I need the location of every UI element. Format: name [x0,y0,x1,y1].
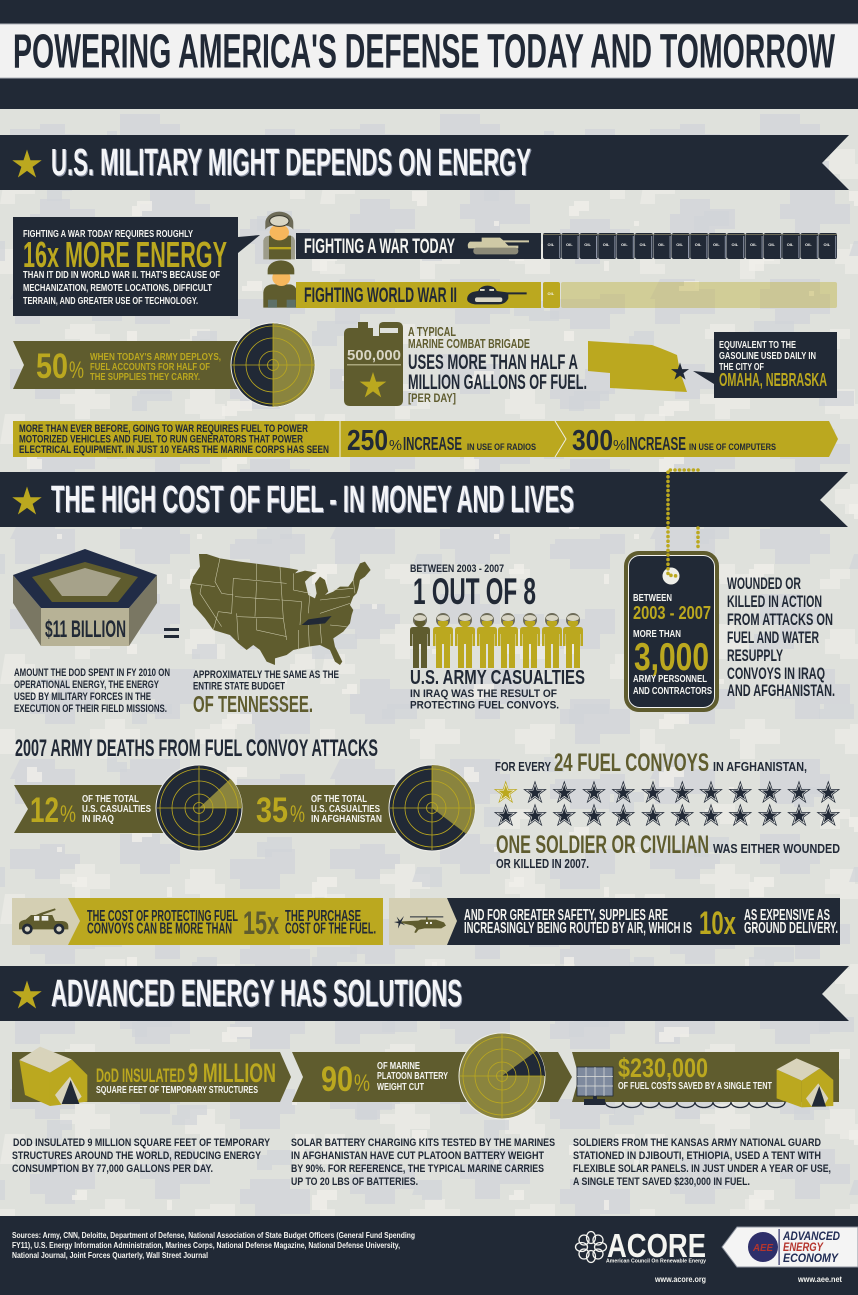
icon: insulated tent [19,1047,87,1106]
icon: solar panel with cable [577,1067,791,1108]
text: state budget of Tennessee: APPROXIMATELY THE SAME AS THE [193,669,339,681]
callout: 16x more energy: THAN IT DID IN WORLD WAR II. THAT'S BECAUSE OF [23,269,220,281]
radar chart: 12% Iraq [156,765,242,851]
ribbon: 50% of supplies: FUEL ACCOUNTS FOR HALF OF [90,361,210,373]
icon: Pentagon $11 billion [13,549,157,646]
text: one soldier or civilian: OR KILLED IN 2007. [496,856,589,871]
text: marine brigade fuel use [408,325,587,405]
text: one soldier or civilian [496,831,840,871]
callout: Omaha, Nebraska: GASOLINE USED DAILY IN [719,350,816,362]
dog tag: 3,000 wounded or killed: AND CONTRACTORS [633,685,712,697]
arrow bar: increases in electrical use: 300 [572,425,613,457]
ribbon: 50% of supplies: WHEN TODAY'S ARMY DEPLOYS, [90,351,221,363]
text: DoD insulation detail: CONSUMPTION BY 77,000 GALLONS PER DAY. [12,1163,213,1175]
ribbon: casualties 12% and 35%: U.S. CASUALTIES [82,803,151,815]
oil barrels: war today (16x): OIL [732,242,739,247]
text: marine brigade fuel use: MARINE COMBAT BRIGADE [408,337,530,351]
ribbon: casualties 12% and 35%: % [290,801,305,828]
arrow bar: increases in electrical use: INCREASE [403,434,462,454]
oil barrels: war today (16x) [543,233,837,259]
arrow bar: increases in electrical use: IN USE OF COMPUTERS [689,442,776,452]
text: solar battery detail: SOLAR BATTERY CHARGING KITS TESTED BY THE MARINES [291,1137,555,1149]
oil barrels: war today (16x): OIL [566,242,573,247]
logo: ACORE: American Council On Renewable Energy [606,1258,706,1264]
text: DoD energy spend: USED BY MILITARY FORCES IN THE [14,691,151,703]
ribbon: casualties 12% and 35% [14,785,405,833]
title band [0,0,858,109]
callout: 16x more energy: TERRAIN, AND GREATER USE OF TECHNOLOGY. [23,295,198,307]
text: state budget of Tennessee: ENTIRE STATE BUDGET [193,680,285,692]
arrow bar: increases in electrical use: % [389,437,402,454]
sources: National Journal, Joint Forces Quarterly, Wall Street Journal [12,1250,208,1260]
oil barrels: war today (16x): OIL [805,242,812,247]
logo: Advanced Energy Economy: ADVANCED [782,1231,840,1243]
panel: cost of protecting convoys: 15x [243,905,279,941]
icon: WWII tank [467,286,527,304]
text: solar battery detail: BY 90%. FOR REFERENCE, THE TYPICAL MARINE CARRIES [291,1163,544,1175]
callout: 16x more energy: MECHANIZATION, REMOTE LOCATIONS, DIFFICULT [23,282,212,294]
icon: solar tent [777,1058,833,1107]
arrow bar: increases in electrical use: MORE THAN EVER BEFORE, GOING TO WAR REQUIRES FUEL TO POWER [19,423,308,435]
text: 24 fuel convoys: IN AFGHANISTAN, [713,759,807,774]
website links: www.acore.org [654,1275,706,1284]
arrow bar: increases in electrical use: ELECTRICAL EQUIPMENT. IN JUST 10 YEARS THE MARINE CORPS HAS SEEN [19,444,329,456]
callout: Omaha, Nebraska [693,332,837,398]
dog tag: 3,000 wounded or killed: 2003 - 2007 [633,603,711,623]
icon: modern tank [468,238,529,254]
panel: supplies routed by air [389,898,840,945]
website links: www.aee.net [797,1275,842,1284]
pictogram: eight soldiers, one highlighted [410,613,583,668]
callout: Omaha, Nebraska: THE CITY OF [719,361,764,373]
ribbon: 50% of supplies: THE SUPPLIES THEY CARRY. [90,371,200,383]
ribbon: 90% battery weight cut [292,1052,572,1102]
dog tag: 3,000 wounded or killed: BETWEEN [633,592,672,604]
oil barrels: war today (16x): OIL [640,242,647,247]
equals sign [164,628,179,638]
icon: humvee [19,908,68,934]
icon: WWII soldier [263,260,297,308]
oil barrels: war today (16x): OIL [584,242,592,247]
text: marine brigade fuel use: USES MORE THAN HALF A [408,351,578,374]
oil barrels: war today (16x): OIL [750,242,757,247]
oil barrels: war today (16x): OIL [695,242,702,247]
ribbon: casualties 12% and 35%: % [60,801,76,828]
text: wounded or killed in action: RESUPPLY [727,646,783,665]
callout: 16x more energy [13,217,260,316]
oil barrels: World War II (1x): OIL [548,291,555,296]
oil barrels: war today (16x): OIL [713,242,720,247]
text: solar battery detail [291,1137,555,1188]
ribbon: casualties 12% and 35%: 35 [256,791,288,830]
ribbon: $230,000 saved by a single tent: OF FUEL COSTS SAVED BY A SINGLE TENT [618,1080,772,1092]
stat: 1 out of 8 casualties [410,563,585,712]
panel: supplies routed by air: INCREASINGLY BEING ROUTED BY AIR, WHICH IS [464,920,692,937]
callout: 16x more energy: FIGHTING A WAR TODAY REQUIRES ROUGHLY [23,228,193,240]
oil barrels: war today (16x): OIL [787,242,794,247]
section banner: advanced energy solutions [0,966,849,1021]
heading: 2007 army deaths: 2007 ARMY DEATHS FROM FUEL CONVOY ATTACKS [15,735,378,762]
ribbon: casualties 12% and 35%: IN AFGHANISTAN [311,813,382,825]
ribbon: 90% battery weight cut: % [354,1070,370,1097]
logo: Advanced Energy Economy: AEE [752,1243,773,1254]
arrow bar: increases in electrical use: IN USE OF RADIOS [467,442,536,452]
text: state budget of Tennessee [193,669,339,717]
text: DoD energy spend: AMOUNT THE DOD SPENT IN FY 2010 ON [14,667,170,679]
arrow bar: increases in electrical use: MOTORIZED VEHICLES AND FUEL TO RUN GENERATORS THAT POWER [19,434,303,446]
ribbon: $230,000 saved by a single tent: $230,000 [618,1053,708,1083]
text: one soldier or civilian: ONE SOLDIER OR CIVILIAN [496,831,709,859]
footer [0,1216,858,1295]
text: DoD insulation detail: STRUCTURES AROUND THE WORLD, REDUCING ENERGY [12,1150,262,1162]
ribbon: DoD insulated 9 million: 9 MILLION [188,1058,276,1088]
oil barrels: war today (16x): OIL [603,242,610,247]
radar chart: 50% [231,323,315,407]
panel: cost of protecting convoys: COST OF THE FUEL. [285,920,376,938]
section banner: advanced energy solutions: ADVANCED ENERGY HAS SOLUTIONS [51,973,462,1015]
ribbon: 90% battery weight cut: OF MARINE [377,1060,420,1072]
oil barrels: war today (16x): OIL [676,242,684,247]
text: wounded or killed in action: WOUNDED OR [727,574,801,593]
text: solar battery detail: IN AFGHANISTAN HAVE CUT PLATOON BATTERY WEIGHT [291,1150,544,1162]
oil barrels: war today (16x): OIL [824,242,831,247]
text: DoD energy spend [14,667,170,715]
ribbon: $230,000 saved by a single tent [572,1052,839,1108]
logo: ACORE [576,1227,706,1264]
logo: Advanced Energy Economy [722,1227,858,1267]
text: state budget of Tennessee: OF TENNESSEE. [193,691,313,717]
ribbon: 50% of supplies: % [69,357,84,384]
icon: fuel can 500,000: 500,000 [347,347,401,364]
ribbon: DoD insulated 9 million: DoD INSULATED [96,1066,185,1087]
dog tag: 3,000 wounded or killed [626,553,717,710]
ribbon: 90% battery weight cut: WEIGHT CUT [377,1081,424,1093]
ribbon: casualties 12% and 35%: OF THE TOTAL [82,793,139,805]
radar chart: 90% [459,1033,545,1119]
ribbon: 50% of supplies [13,341,240,389]
arrow bar: increases in electrical use [13,421,838,457]
arrow bar: increases in electrical use: INCREASE [626,434,686,454]
dog tag chain [668,470,698,576]
ribbon: 50% of supplies: 50 [36,347,68,386]
website links [654,1275,842,1284]
text: DoD insulation detail: DOD INSULATED 9 MILLION SQUARE FEET OF TEMPORARY [13,1137,271,1149]
stat: 1 out of 8 casualties: BETWEEN 2003 - 2007 [410,563,504,575]
text: solar tent detail [573,1137,831,1188]
ribbon: casualties 12% and 35%: 12 [30,791,59,830]
text: wounded or killed in action [727,574,835,700]
text: marine brigade fuel use: MILLION GALLONS OF FUEL. [408,371,587,394]
ribbon: casualties 12% and 35%: U.S. CASUALTIES [311,803,380,815]
stat: 1 out of 8 casualties: IN IRAQ WAS THE RESULT OF [410,688,557,700]
stat: 1 out of 8 casualties: U.S. ARMY CASUALTIES [410,667,585,689]
sources [12,1230,415,1260]
oil barrels: war today (16x): OIL [621,242,628,247]
panel: cost of protecting convoys: CONVOYS CAN BE MORE THAN [87,920,232,938]
band: fighting World War II: FIGHTING WORLD WAR II [304,284,457,307]
panel: cost of protecting convoys [12,898,383,945]
logo: Advanced Energy Economy: ENERGY [783,1242,824,1254]
text: marine brigade fuel use: A TYPICAL [408,325,456,339]
panel: cost of protecting convoys: THE COST OF PROTECTING FUEL [87,908,238,925]
arrow bar: increases in electrical use: 250 [347,425,388,457]
stat: 1 out of 8 casualties: 1 OUT OF 8 [413,571,536,612]
ribbon: 90% battery weight cut: PLATOON BATTERY [377,1070,448,1082]
ribbon: 90% battery weight cut: 90 [321,1060,353,1099]
logo: ACORE: ACORE [607,1227,706,1264]
ribbon: DoD insulated 9 million [12,1047,291,1106]
ribbon: DoD insulated 9 million: SQUARE FEET OF TEMPORARY STRUCTURES [96,1084,258,1096]
text: DoD insulation detail [12,1137,271,1175]
map: Nebraska [588,341,689,392]
panel: supplies routed by air: AND FOR GREATER SAFETY, SUPPLIES ARE [464,907,668,924]
stat: 1 out of 8 casualties: PROTECTING FUEL CONVOYS. [410,700,559,712]
sources: FY11), U.S. Energy Information Administration, Marines Corps, National Defense Magazine, National Defense University, [12,1240,400,1250]
sources: Sources: Army, CNN, Deloitte, Department of Defense, National Association of State Budget Officers (General Fund Spending [12,1230,415,1240]
dog tag: 3,000 wounded or killed: MORE THAN [633,628,681,640]
oil barrels: war today (16x): OIL [768,242,776,247]
callout: 16x more energy: 16x MORE ENERGY [23,234,227,275]
icon: helicopter [394,916,446,933]
band: fighting a war today: FIGHTING A WAR TODAY [304,235,455,258]
oil barrels: war today (16x): OIL [548,242,555,247]
dog tag: 3,000 wounded or killed: 3,000 [634,636,709,679]
panel: cost of protecting convoys: THE PURCHASE [285,908,361,925]
text: solar tent detail: A SINGLE TENT SAVED $230,000 IN FUEL. [573,1176,750,1188]
text: 24 fuel convoys: FOR EVERY [495,759,551,774]
radar chart: 35% Afghanistan [389,765,475,851]
text: DoD energy spend: OPERATIONAL ENERGY, THE ENERGY [14,679,159,691]
text: 24 fuel convoys: 24 FUEL CONVOYS [554,749,709,777]
dog tag: 3,000 wounded or killed: ARMY PERSONNEL [633,673,707,685]
oil barrels: war today (16x): OIL [658,242,665,247]
$11 billion figure: $11 BILLION [45,616,126,643]
ribbon: casualties 12% and 35%: IN IRAQ [82,813,114,825]
panel: supplies routed by air: 10x [699,905,736,941]
logo: Advanced Energy Economy: ECONOMY [783,1253,839,1265]
section banner: U.S. military might: U.S. MILITARY MIGHT DEPENDS ON ENERGY [51,142,531,184]
text: DoD energy spend: EXECUTION OF THEIR FIELD MISSIONS. [14,703,167,715]
oil barrels: World War II (1x) [543,282,837,308]
text: marine brigade fuel use: [PER DAY] [408,393,456,405]
map: United States with Tennessee highlighted [190,554,371,665]
icon: modern soldier [263,212,295,259]
arrow bar: increases in electrical use: % [613,437,626,454]
ribbon: casualties 12% and 35%: OF THE TOTAL [311,793,367,805]
icon: fuel can 500,000 [344,322,403,406]
pictogram: 24 stars, one highlighted [494,780,840,826]
callout: Omaha, Nebraska: EQUIVALENT TO THE [719,339,796,351]
text: solar battery detail: UP TO 20 LBS OF BATTERIES. [291,1176,418,1188]
